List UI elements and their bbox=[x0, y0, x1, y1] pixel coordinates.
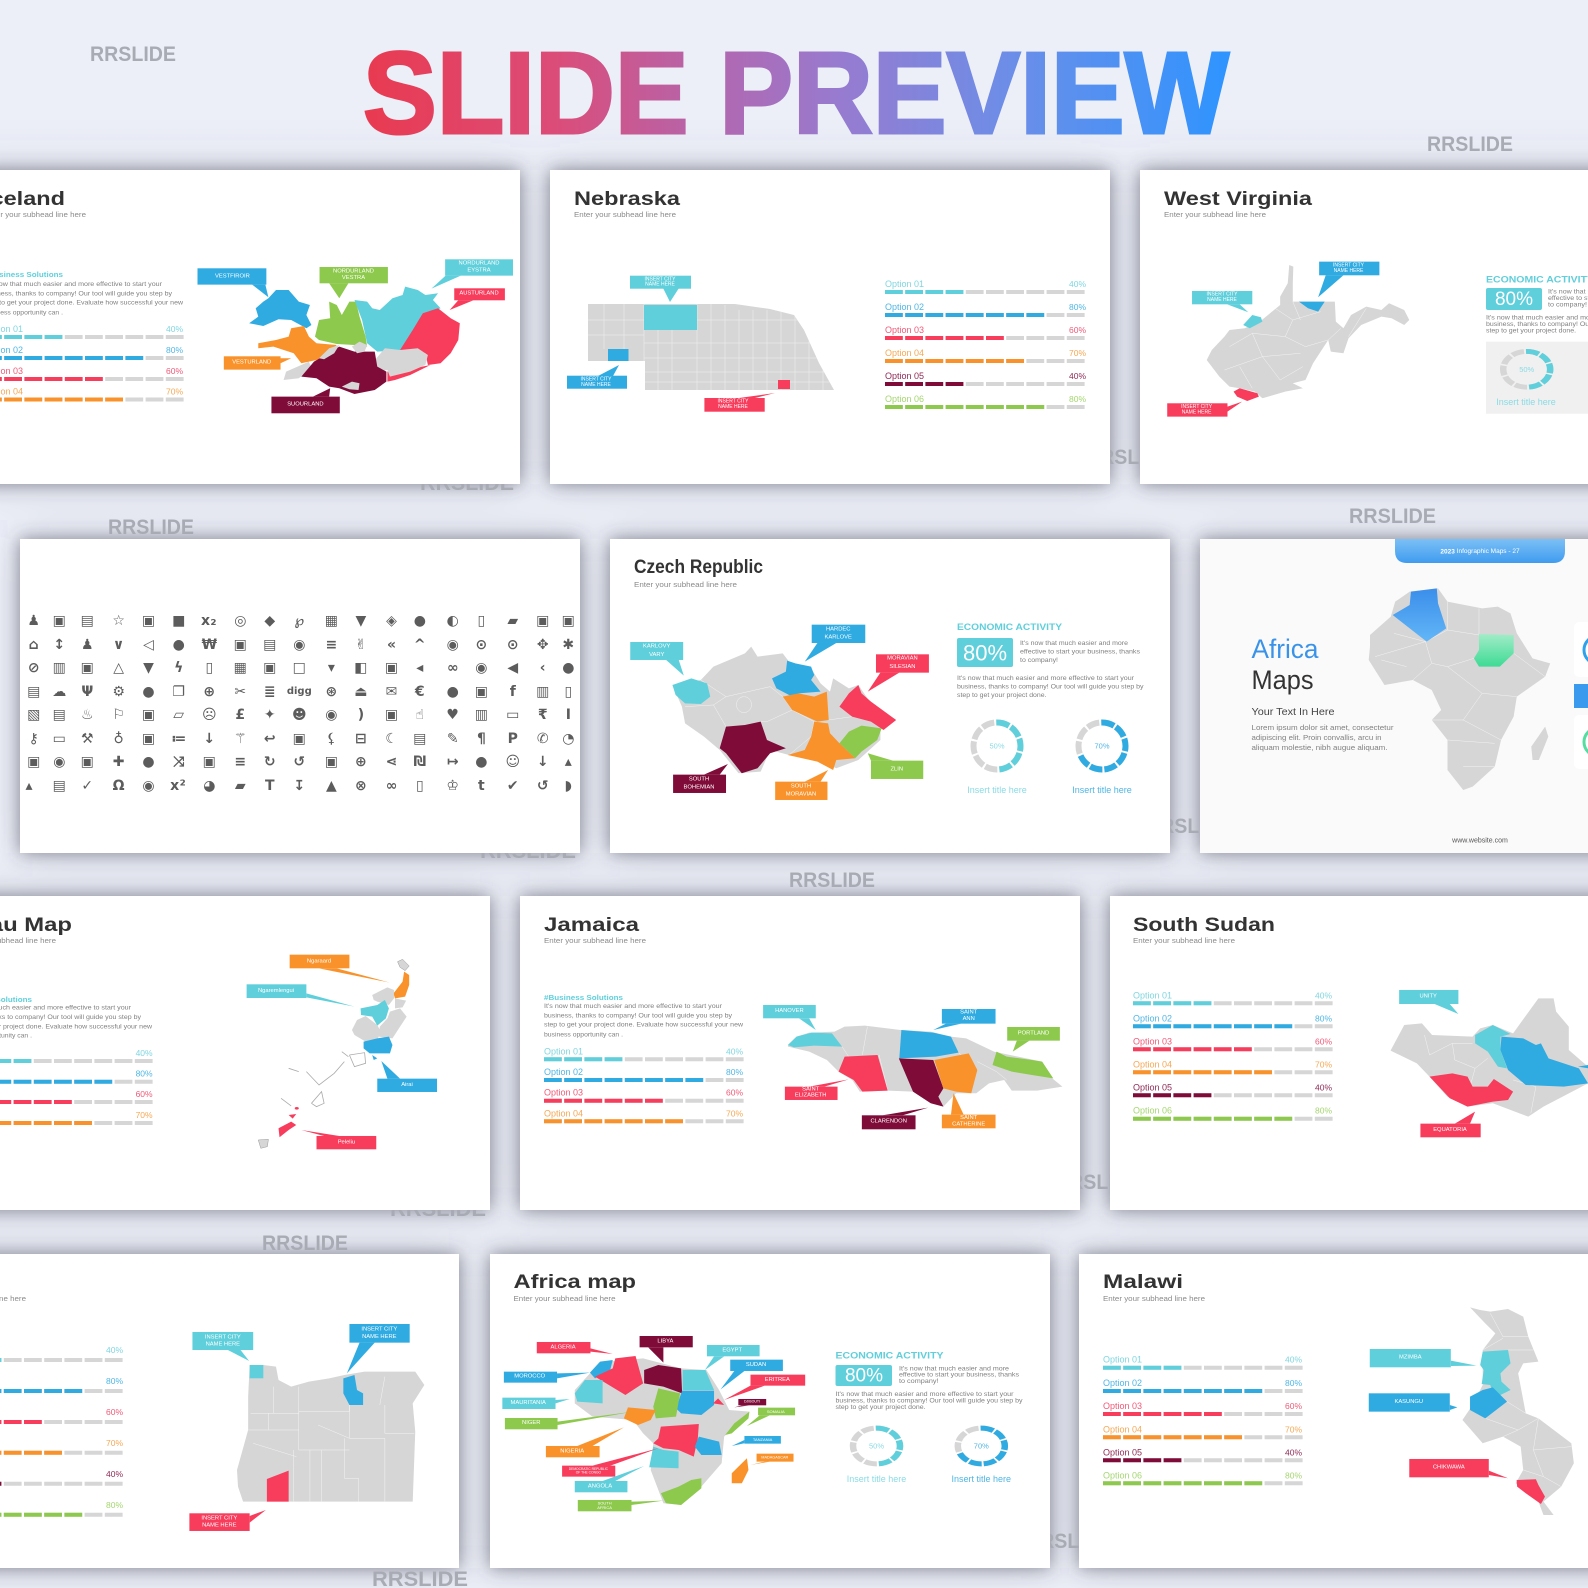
map: Oregon: INSERT CITY bbox=[205, 1334, 241, 1340]
panel: West Virginia slide bbox=[1140, 170, 1588, 484]
map: Czech Republic: BOHEMIAN bbox=[684, 785, 714, 791]
economic activity block: 80% bbox=[963, 640, 1007, 666]
panel: Jamaica slide bbox=[520, 896, 1080, 1210]
progress bars: 70% bbox=[1315, 1059, 1332, 1069]
panel: Malawi slide: Malawi bbox=[1103, 1272, 1183, 1293]
panel: Africa Maps slide: www.website.com bbox=[1451, 838, 1508, 844]
progress bars: 40% bbox=[1285, 1355, 1302, 1365]
map: Iceland: VESTFIROIR bbox=[215, 274, 250, 280]
progress bars: 70% bbox=[1069, 348, 1086, 358]
map: Jamaica: HANOVER bbox=[775, 1008, 804, 1014]
map: Africa: LIBYA bbox=[657, 1338, 674, 1344]
heading: Africa bbox=[1252, 634, 1319, 664]
map: Africa: EGYPT bbox=[722, 1347, 742, 1353]
text block: business solutions: step to get your project done. Evaluate how successful your new bbox=[544, 1023, 744, 1029]
progress bars: 60% bbox=[136, 1089, 153, 1099]
text block: business solutions: business, thanks to company! Our tool will guide you step by bbox=[544, 1014, 732, 1020]
donut: 70%: Insert title here bbox=[952, 1474, 1011, 1484]
progress bars: 80% bbox=[1069, 302, 1086, 312]
icon rows: ▣◉▣✚●⤨▣≡↻↺▣⊕⋖₪↦●☺↓▴ bbox=[27, 754, 572, 770]
progress bars: 40% bbox=[166, 324, 183, 334]
map: West Virginia: INSERT CITY bbox=[1181, 404, 1213, 410]
economic activity block: It's now that much easier and more bbox=[1020, 641, 1129, 647]
map: Iceland: VESTURLAND bbox=[232, 360, 271, 366]
progress bars bbox=[1103, 1355, 1303, 1483]
text block: Your Text In Here bbox=[1252, 706, 1335, 718]
map: Africa: NIGER bbox=[522, 1420, 540, 1426]
progress bars: Option 04 bbox=[1103, 1424, 1142, 1434]
map: West Virginia: INSERT CITY bbox=[1207, 292, 1238, 298]
panel: Nebraska slide: Enter your subhead line here bbox=[574, 212, 676, 219]
progress bars: Option 04 bbox=[1133, 1059, 1172, 1069]
map: South Sudan bbox=[1391, 990, 1588, 1137]
economic activity block: effective to start your business, thanks bbox=[1020, 649, 1140, 655]
progress bars: 40% bbox=[1315, 1082, 1332, 1092]
watermarks: RRSLIDE bbox=[390, 1198, 486, 1221]
icon rows: ▤☁Ψ⚙●❐⊕✂≣⊛⏏✉€●▣f▥▯ bbox=[27, 684, 572, 700]
panel: West Virginia slide: West Virginia bbox=[1164, 189, 1313, 210]
text block: business solutions bbox=[544, 993, 744, 1038]
map: Palau: Airai bbox=[401, 1082, 413, 1088]
map: Palau: Ngaraard bbox=[307, 958, 331, 964]
panel: South Sudan slide: Enter your subhead line here bbox=[1133, 938, 1235, 945]
progress bars: Option 01 bbox=[544, 1046, 583, 1056]
watermarks: RRSLIDE bbox=[1086, 446, 1172, 469]
map: Iceland: NORDURLAND bbox=[333, 269, 374, 275]
map: West Virginia: NAME HERE bbox=[1334, 268, 1364, 274]
progress bars: 60% bbox=[106, 1407, 123, 1417]
panel: West Virginia slide: Enter your subhead line here bbox=[1164, 212, 1266, 219]
map: Jamaica: CLARENDON bbox=[870, 1119, 907, 1125]
progress bars: Option 01 bbox=[885, 279, 924, 289]
panel: Malawi slide bbox=[1079, 1254, 1588, 1568]
economic activity block: It's now that much easier and more effective to start your bbox=[957, 676, 1134, 682]
map: West Virginia: NAME HERE bbox=[1207, 297, 1238, 303]
economic activity block: It's now that much easier and more bbox=[899, 1366, 1010, 1372]
icon rows: ⊘▥▣△▼ϟ▯▦▣□▾◧▣◂∞◉◀‹● bbox=[28, 660, 574, 676]
map: Nebraska: NAME HERE bbox=[718, 404, 749, 410]
map: South Sudan: UNITY bbox=[1419, 993, 1437, 999]
map: Iceland bbox=[197, 259, 513, 413]
progress bars: Option 03 bbox=[544, 1088, 583, 1098]
map: Africa: MAURITANIA bbox=[511, 1400, 546, 1406]
text block: adipiscing elit. Proin convallis, arcu in bbox=[1252, 733, 1382, 742]
economic activity block bbox=[957, 622, 1144, 795]
progress bars: 80% bbox=[1315, 1013, 1332, 1023]
progress bars: Option 06 bbox=[1103, 1470, 1142, 1480]
map: West Virginia: NAME HERE bbox=[1182, 410, 1212, 416]
progress bars: Option 05 bbox=[885, 371, 924, 381]
map: Malawi: CHIKWAWA bbox=[1433, 1464, 1465, 1470]
map: Oregon: NAME HERE bbox=[202, 1523, 237, 1529]
map: Malawi: MZIMBA bbox=[1399, 1354, 1422, 1360]
title: SLIDE PREVIEW bbox=[363, 28, 1229, 158]
progress bars: Option 05 bbox=[1103, 1447, 1142, 1457]
map: Africa: TANZANIA bbox=[753, 1437, 773, 1442]
progress bars: 80% bbox=[106, 1500, 123, 1510]
economic activity block: It's now that much easier and more effective to start your bbox=[836, 1392, 1014, 1398]
map: Oregon: INSERT CITY bbox=[361, 1327, 397, 1333]
progress bars bbox=[0, 1048, 153, 1123]
watermarks: RRSLIDE bbox=[90, 43, 176, 66]
progress bars: Option 03 bbox=[1133, 1036, 1172, 1046]
panel: icon grid slide bbox=[20, 539, 580, 853]
map: Iceland: SUOURLAND bbox=[287, 402, 324, 408]
map: Iceland: AUSTURLAND bbox=[459, 291, 499, 297]
map: Jamaica: SAINT bbox=[960, 1115, 978, 1121]
map: Palau bbox=[247, 955, 437, 1149]
donut: 70% bbox=[952, 1428, 1011, 1484]
economic activity block: ECONOMIC ACTIVITY bbox=[836, 1351, 944, 1361]
panel: Africa map slide: Enter your subhead line here bbox=[514, 1296, 616, 1303]
map: Malawi bbox=[1369, 1307, 1574, 1515]
map: Jamaica: ELIZABETH bbox=[795, 1093, 826, 1099]
heading bbox=[1252, 634, 1319, 695]
icon rows: digg bbox=[287, 686, 312, 697]
header tab: 2023 Infographic Maps - 27 bbox=[1440, 548, 1520, 555]
economic activity block: 80% bbox=[1495, 289, 1533, 310]
donut: 50%: Insert title here bbox=[967, 785, 1027, 795]
progress bars: 60% bbox=[1285, 1401, 1302, 1411]
map: Czech Republic: SOUTH bbox=[689, 776, 709, 782]
map: Jamaica: SAINT bbox=[960, 1010, 978, 1016]
progress bars: 40% bbox=[1315, 990, 1332, 1000]
progress bars: 80% bbox=[1285, 1378, 1302, 1388]
map: Africa: SOUTH bbox=[598, 1500, 612, 1506]
map: Oregon: NAME HERE bbox=[362, 1334, 397, 1340]
text block: Lorem ipsum dolor sit amet, consectetur bbox=[1252, 723, 1394, 732]
map: Czech Republic: MORAVIAN bbox=[786, 792, 816, 798]
panel: Iceland slide bbox=[0, 170, 520, 484]
map: Czech Republic: SOUTH bbox=[791, 783, 811, 789]
panel: Africa Maps slide bbox=[1200, 539, 1588, 853]
map: Iceland: EYSTRA bbox=[467, 267, 491, 273]
panel: Jamaica slide: Jamaica bbox=[544, 915, 640, 936]
map: Jamaica: PORTLAND bbox=[1018, 1030, 1049, 1036]
donut: 70%: 70% bbox=[1094, 742, 1110, 750]
map: Jamaica: ANN bbox=[963, 1016, 975, 1022]
map: Oregon: INSERT CITY bbox=[201, 1515, 237, 1521]
text block: business solutions: #Business Solutions bbox=[544, 993, 623, 1002]
text block: business solutions bbox=[0, 995, 153, 1040]
panel: Jamaica slide: Enter your subhead line here bbox=[544, 938, 646, 945]
economic activity block: to company! bbox=[899, 1379, 939, 1385]
progress bars: 80% bbox=[1069, 394, 1086, 404]
map: Africa: ANGOLA bbox=[588, 1483, 612, 1489]
progress bars bbox=[544, 1046, 744, 1121]
donut: 50%: Insert title here bbox=[847, 1474, 906, 1484]
economic activity block: step to get your project done. bbox=[957, 693, 1047, 699]
economic activity block: ECONOMIC ACTIVITY bbox=[1486, 275, 1588, 285]
progress bars: 80% bbox=[1285, 1470, 1302, 1480]
progress bars: Option 01 bbox=[1133, 990, 1172, 1000]
watermarks: RRSLIDE bbox=[1146, 815, 1232, 838]
progress bars bbox=[0, 324, 184, 400]
map: Africa: MADAGASCAR bbox=[761, 1456, 789, 1460]
map: Czech Republic: SILESIAN bbox=[889, 664, 915, 670]
progress bars: Option 02 bbox=[544, 1067, 583, 1077]
map: Jamaica: CATHERINE bbox=[952, 1121, 985, 1127]
map: Africa: OF THE CONGO bbox=[576, 1470, 602, 1474]
progress bars: 40% bbox=[1069, 279, 1086, 289]
progress bars: 60% bbox=[726, 1088, 743, 1098]
map: Czech Republic: VARY bbox=[649, 652, 664, 658]
donut: 50% bbox=[967, 722, 1027, 795]
map: West Virginia: INSERT CITY bbox=[1333, 263, 1365, 269]
icon rows: ♟▣▤☆▣■x₂◎◆℘▦▼◈●◐▯▰▣▣ bbox=[27, 613, 575, 629]
progress bars: Option 02 bbox=[1103, 1378, 1142, 1388]
map: Czech Republic: ZLIN bbox=[891, 767, 903, 773]
watermarks: RRSLIDE bbox=[108, 516, 194, 539]
progress bars: 70% bbox=[166, 386, 183, 396]
progress bars: 40% bbox=[726, 1046, 743, 1056]
map: Nebraska: NAME HERE bbox=[645, 282, 676, 288]
map: Oregon: NAME HERE bbox=[206, 1342, 240, 1348]
progress bars: Option 03 bbox=[1103, 1401, 1142, 1411]
panel: Nebraska slide: Nebraska bbox=[574, 189, 681, 210]
economic activity block: effective to start your business, thanks bbox=[899, 1373, 1019, 1379]
donut: 50% bbox=[1496, 351, 1556, 407]
map: Nebraska: NAME HERE bbox=[581, 382, 612, 388]
map: South Sudan: EQUATORIA bbox=[1433, 1127, 1467, 1133]
map: Palau: Peleliu bbox=[338, 1139, 355, 1145]
progress bars: 40% bbox=[1285, 1447, 1302, 1457]
progress bars bbox=[0, 1345, 123, 1515]
side cards bbox=[1574, 622, 1588, 769]
map: Africa gray bbox=[1369, 588, 1550, 790]
map: Africa: ALGERIA bbox=[551, 1344, 576, 1350]
progress bars: 60% bbox=[1315, 1036, 1332, 1046]
donut: 50%: Insert title here bbox=[1496, 397, 1556, 407]
donut: 70%: 70% bbox=[974, 1442, 989, 1450]
map: Africa: DEMOCRATIC REPUBLIC bbox=[569, 1467, 609, 1471]
heading: Maps bbox=[1252, 665, 1314, 695]
watermarks: RRSLIDE bbox=[1055, 1171, 1141, 1194]
economic activity block: ECONOMIC ACTIVITY bbox=[957, 622, 1062, 632]
icon rows: ⚷▭⚒♁▣≔↓⚚↩▣⚸⊟☾▤✎¶P✆◔ bbox=[29, 731, 574, 747]
map: Jamaica: SAINT bbox=[802, 1086, 820, 1092]
progress bars: Option 04 bbox=[544, 1108, 583, 1118]
donut: 50%: 50% bbox=[989, 742, 1005, 750]
map: Africa: NIGERIA bbox=[560, 1448, 584, 1454]
map: Oregon bbox=[189, 1324, 424, 1531]
panel: Africa map slide: Africa map bbox=[514, 1272, 636, 1293]
progress bars: Option 06 bbox=[1133, 1106, 1172, 1116]
economic activity block bbox=[836, 1351, 1022, 1484]
icon rows bbox=[25, 613, 575, 794]
progress bars: 80% bbox=[726, 1067, 743, 1077]
progress bars: 40% bbox=[106, 1469, 123, 1479]
icon rows: ⌂↕♟∨◁●₩▣▤◉≡✌«^◉⊙⊙✥✱ bbox=[29, 637, 574, 653]
map: Nebraska: INSERT CITY bbox=[645, 276, 676, 282]
progress bars: 40% bbox=[136, 1048, 153, 1058]
text block bbox=[1252, 706, 1394, 752]
economic activity block: to company! bbox=[1548, 302, 1587, 308]
text block: aliquam molestie, nibh augue aliquam. bbox=[1252, 743, 1388, 752]
watermarks: RRSLIDE bbox=[262, 1232, 348, 1255]
panel: Czech Republic slide bbox=[610, 539, 1170, 853]
panel: Africa map slide bbox=[490, 1254, 1050, 1568]
progress bars bbox=[885, 279, 1086, 407]
map: Africa: AFRICA bbox=[597, 1505, 612, 1510]
progress bars: 70% bbox=[1285, 1424, 1302, 1434]
map: Palau: Ngaremlengui bbox=[258, 988, 294, 994]
progress bars: Option 01 bbox=[1103, 1355, 1142, 1365]
progress bars: 40% bbox=[106, 1345, 123, 1355]
panel: Malawi slide: Enter your subhead line here bbox=[1103, 1296, 1205, 1303]
map: Africa: DJIBOUTI bbox=[744, 1400, 760, 1404]
map: Africa: ERITREA bbox=[765, 1377, 790, 1383]
text block: business solutions: business opportunity can . bbox=[544, 1032, 623, 1038]
progress bars: 40% bbox=[1069, 371, 1086, 381]
icon rows: ▧▤♨⚐▣▱☹£✦☻◉)▣☝♥▥▭₹I bbox=[27, 707, 571, 723]
map: Iceland: VESTRA bbox=[342, 275, 365, 281]
watermarks: RRSLIDE bbox=[1427, 133, 1513, 156]
progress bars: Option 03 bbox=[885, 325, 924, 335]
panel: South Sudan slide: South Sudan bbox=[1133, 915, 1275, 936]
text block: business solutions bbox=[0, 270, 184, 316]
progress bars: 70% bbox=[136, 1110, 153, 1120]
economic activity block: to company! bbox=[1020, 658, 1058, 664]
header tab bbox=[1395, 539, 1565, 563]
progress bars: 80% bbox=[1315, 1106, 1332, 1116]
map: Africa: SOMALIA bbox=[767, 1409, 785, 1414]
panel: Nebraska slide bbox=[550, 170, 1110, 484]
progress bars: 70% bbox=[106, 1438, 123, 1448]
progress bars bbox=[1133, 990, 1333, 1119]
donut: 50%: 50% bbox=[869, 1442, 884, 1450]
economic activity block: business, thanks to company! Our tool will guide you step by bbox=[957, 684, 1144, 690]
donut: 50%: 50% bbox=[1519, 365, 1535, 374]
map: Czech Republic: KARLOVY bbox=[643, 644, 671, 650]
watermarks: RRSLIDE bbox=[420, 472, 514, 495]
donut: 70%: Insert title here bbox=[1072, 785, 1132, 795]
economic activity block: 80% bbox=[845, 1366, 883, 1386]
progress bars: 70% bbox=[726, 1108, 743, 1118]
map: Jamaica bbox=[763, 1005, 1062, 1129]
economic activity block: business, thanks to company! Our tool will guide you step by bbox=[836, 1399, 1022, 1405]
progress bars: Option 02 bbox=[1133, 1013, 1172, 1023]
progress bars: 80% bbox=[166, 345, 183, 355]
text block: business solutions: It's now that much easier and more effective to start your bbox=[544, 1004, 722, 1010]
progress bars: Option 06 bbox=[885, 394, 924, 404]
donut: 70% bbox=[1072, 722, 1132, 795]
map: Iceland: NORDURLAND bbox=[459, 261, 499, 267]
map: Africa: SUDAN bbox=[746, 1362, 766, 1368]
panel: Czech Republic slide: Enter your subhead line here bbox=[634, 582, 737, 589]
watermarks: RRSLIDE bbox=[789, 869, 875, 892]
map: Nebraska: INSERT CITY bbox=[718, 399, 749, 405]
progress bars: 60% bbox=[166, 366, 183, 376]
map: Czech Republic: MORAVIAN bbox=[887, 656, 918, 662]
panel: Oregon slide bbox=[0, 1254, 459, 1568]
watermarks: RRSLIDE bbox=[1026, 1530, 1112, 1553]
economic activity block: step to get your project done. bbox=[836, 1405, 926, 1411]
progress bars: 80% bbox=[136, 1069, 153, 1079]
panel: Palau slide bbox=[0, 896, 490, 1210]
map: Africa: MOROCCO bbox=[514, 1374, 546, 1380]
progress bars: 60% bbox=[1069, 325, 1086, 335]
map: Nebraska: INSERT CITY bbox=[581, 376, 612, 382]
watermarks: RRSLIDE bbox=[1349, 505, 1436, 528]
economic activity block: step to get your project done. bbox=[1486, 328, 1576, 334]
progress bars: 80% bbox=[106, 1376, 123, 1386]
watermarks: RRSLIDE bbox=[480, 840, 576, 863]
progress bars: Option 05 bbox=[1133, 1082, 1172, 1092]
progress bars: Option 02 bbox=[885, 302, 924, 312]
map: West Virginia bbox=[1167, 262, 1409, 417]
progress bars: Option 04 bbox=[885, 348, 924, 358]
map: Malawi: KASUNGU bbox=[1394, 1399, 1423, 1405]
icon rows: ▴▤✓Ω◉x²◕▰T↧▲⊗∞▯♔t✔↺◗ bbox=[25, 778, 572, 794]
map: Czech Republic: HARDEC bbox=[826, 626, 850, 632]
map: Czech Republic: KARLOVE bbox=[825, 635, 852, 641]
donut: 50% bbox=[847, 1428, 906, 1484]
panel: South Sudan slide bbox=[1110, 896, 1588, 1210]
economic activity block bbox=[1486, 275, 1588, 414]
map: Czech Republic bbox=[630, 625, 929, 800]
map: Africa bbox=[502, 1336, 805, 1511]
panel: Czech Republic slide: Czech Republic bbox=[634, 557, 763, 578]
map: Nebraska bbox=[567, 276, 834, 412]
